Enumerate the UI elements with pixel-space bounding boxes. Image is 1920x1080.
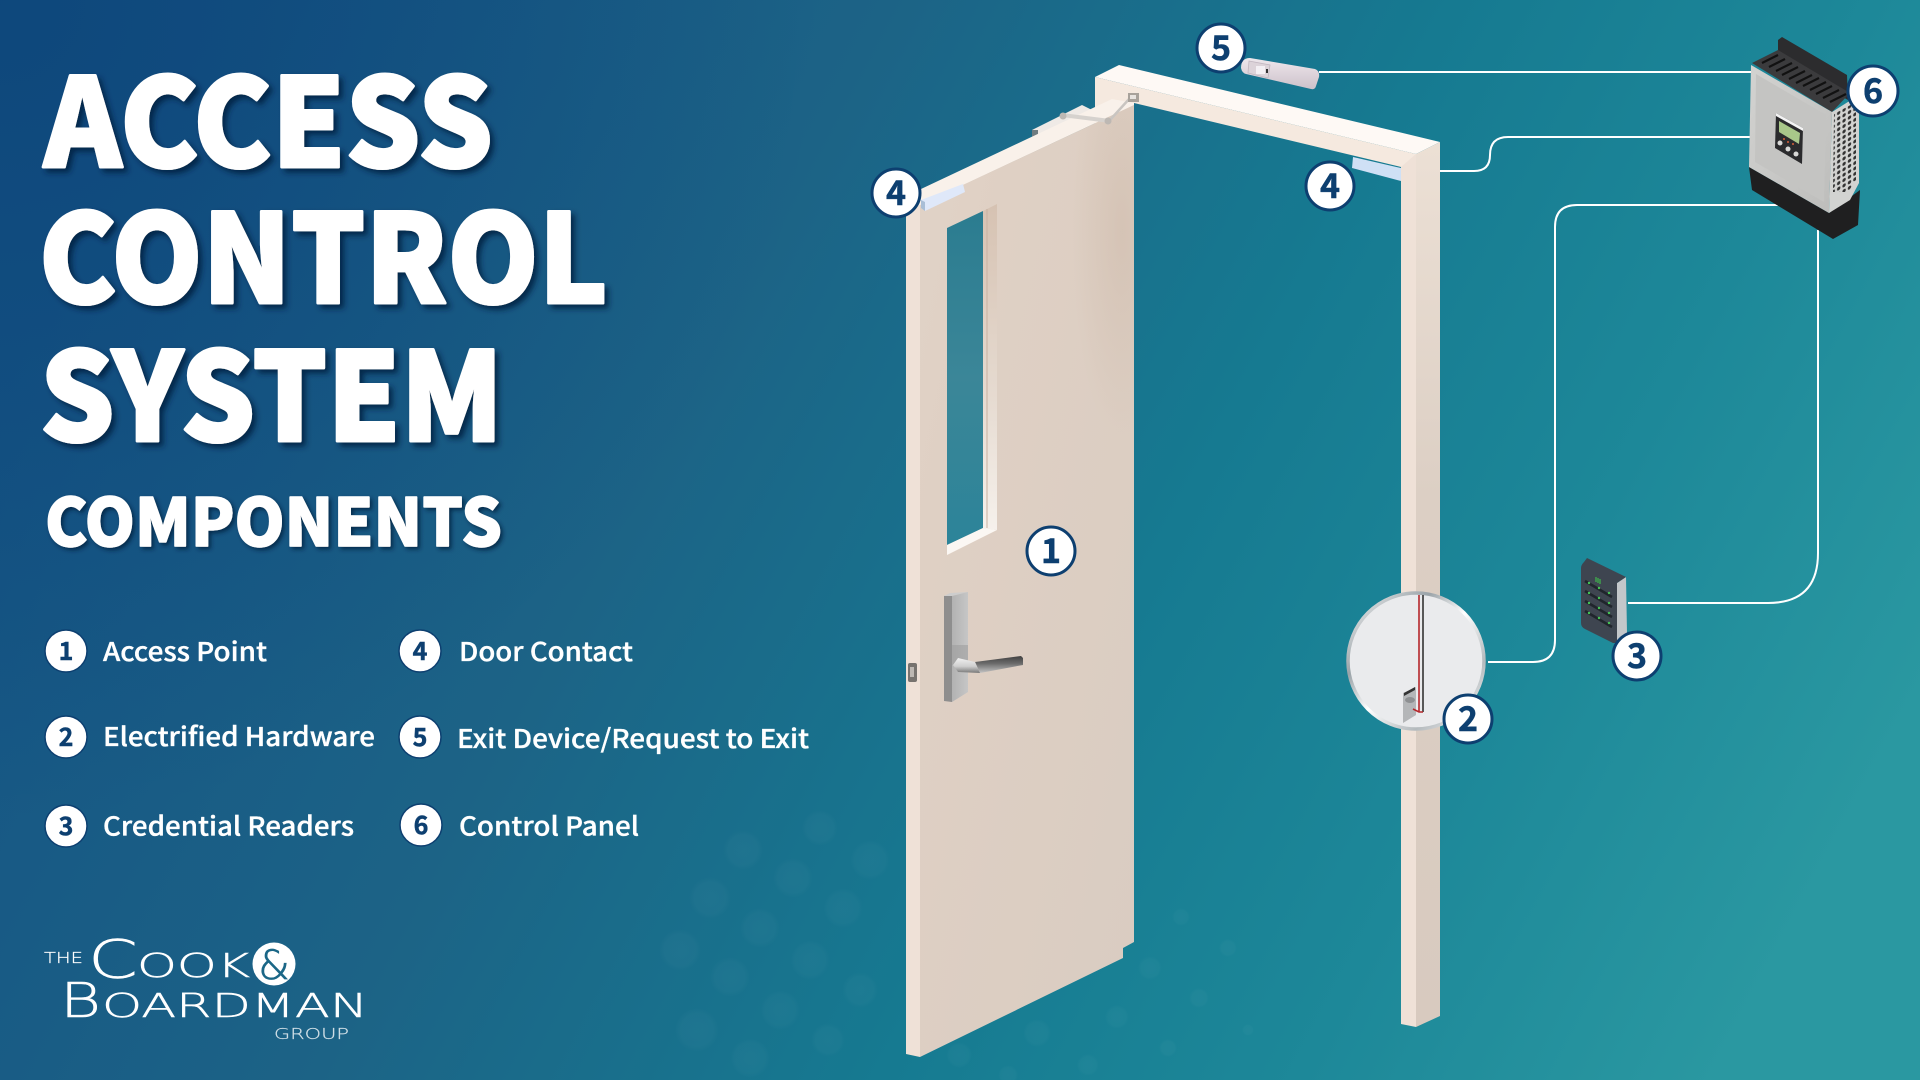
door edge [906,205,920,1057]
window sill [947,528,997,555]
legend item 5: Exit Device/Request to Exit [457,719,809,756]
door face [920,105,1134,1057]
legend item 4: Door Contact [459,632,633,669]
badge 1: 1 [1041,524,1061,573]
panel top vent [1752,50,1850,112]
badge 5 [1197,21,1245,72]
control panel [1749,37,1860,239]
title [39,25,608,477]
legend item 6: Control Panel [459,806,639,844]
legend [45,630,809,847]
lock latch [908,663,917,682]
door frame [1095,65,1440,1027]
badge 4 on frame [1306,159,1354,210]
badge 2: 2 [1458,692,1478,741]
badge 6 [1848,64,1898,116]
door closer body [1032,105,1098,141]
wiring [1319,72,1818,662]
door contact on door [921,184,965,211]
legend item 6: 6 [414,806,428,842]
window reveal [983,204,997,530]
legend item 2 [45,716,375,758]
legend item 2: Electrified Hardware [103,717,375,754]
title line: system: SYSTEM [40,299,503,477]
exit device sensor [1241,58,1319,89]
title line: control: CONTROL [39,161,608,339]
lever handle [953,656,1023,673]
badge 5: 5 [1211,21,1231,70]
legend item 1: Access Point [103,632,267,669]
magnifier: electrified hardware [1348,593,1484,729]
credential reader [1581,558,1627,643]
panel side [1829,95,1859,213]
logo: & [258,943,290,989]
title line: access: ACCESS [43,25,493,203]
legend item 1 [45,630,267,672]
panel base [1749,167,1860,239]
legend item 5: 5 [413,718,427,754]
frame jamb side [1416,142,1440,1027]
panel front [1749,65,1832,213]
door shading [1102,143,1134,312]
panel back plate [1778,37,1848,100]
legend item 3 [45,805,354,847]
frame head front face [1095,77,1416,172]
window glass [947,211,983,545]
badge 4 on door [872,166,920,217]
logo: C [88,930,138,991]
legend item 2: 2 [59,718,73,754]
legend item 3: Credential Readers [103,806,354,844]
logo [44,930,368,1043]
badge 3 [1613,629,1661,680]
badge 6: 6 [1863,64,1883,113]
legend item 1: 1 [59,632,73,668]
legend item 4: 4 [413,632,428,668]
door closer arm [1060,93,1139,124]
door [906,99,1134,1057]
badge 1 [1027,524,1075,575]
door top surface [906,99,1134,212]
subtitle: COMPONENTS [45,470,502,566]
badge 2 [1444,692,1492,743]
panel display [1775,113,1803,164]
logo: GROUP [274,1025,349,1043]
logo: OARDMAN [102,986,368,1025]
legend item 6 [400,804,639,846]
door contact on frame [1352,157,1401,181]
logo: B [60,973,101,1029]
legend item 3: 3 [59,807,73,843]
frame head top surface [1095,65,1440,154]
frame jamb front [1401,154,1416,1027]
badge 4 on door: 4 [886,166,906,215]
badge 3: 3 [1627,629,1647,678]
logo: THE [44,949,83,967]
logo: OOK [137,946,251,985]
legend item 4 [399,630,633,672]
lock escutcheon [944,592,968,702]
badge 4 on frame: 4 [1320,159,1340,208]
